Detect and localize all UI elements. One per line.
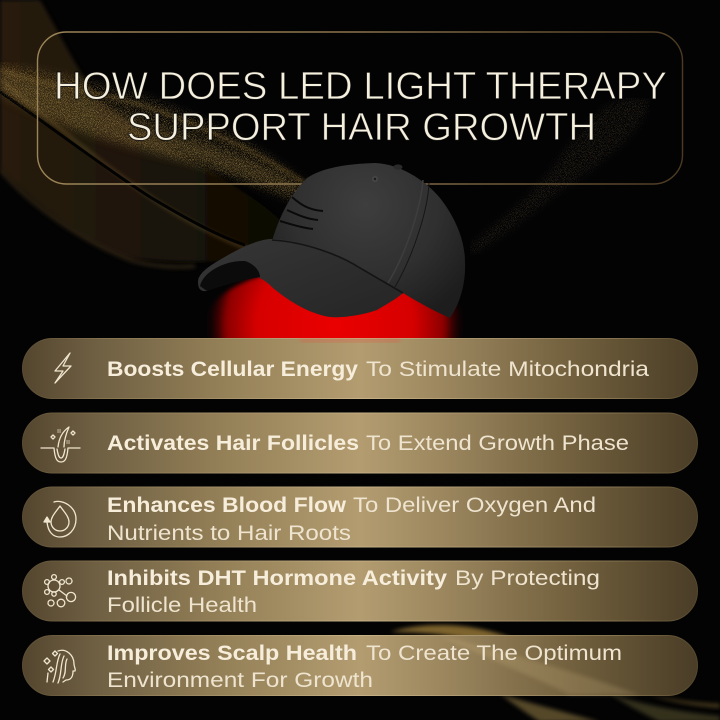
text: inhibits DHT hormone activity (107, 567, 600, 617)
gold light streak crossing panel (440, 636, 640, 695)
title panel (38, 32, 682, 184)
icon: lightning bolt (55, 353, 71, 383)
title heading: SUPPORT HAIR GROWTH (127, 106, 596, 149)
text: enhances blood flow: To Deliver Oxygen And (353, 494, 596, 517)
red LED glow under cap (209, 277, 461, 338)
text: improves scalp health: Improves Scalp Health (107, 642, 357, 665)
text: enhances blood flow: Enhances Blood Flow (107, 494, 347, 517)
cap illustration (198, 163, 465, 318)
panel: enhances blood flow (22, 487, 698, 547)
text: boosts cellular energy: Boosts Cellular Energy (107, 358, 358, 381)
text: improves scalp health: Environment For Growth (107, 669, 373, 692)
text: boosts cellular energy (107, 358, 649, 381)
text: enhances blood flow: Nutrients to Hair Roots (107, 522, 351, 545)
panel: activates hair follicles (22, 413, 698, 473)
text: activates hair follicles (107, 432, 629, 455)
text: boosts cellular energy: To Stimulate Mitochondria (366, 358, 649, 381)
text: inhibits DHT hormone activity: Inhibits DHT Hormone Activity (107, 567, 447, 590)
text: activates hair follicles: To Extend Growth Phase (366, 432, 629, 455)
title heading: HOW DOES LED LIGHT THERAPY (54, 65, 667, 108)
panel: improves scalp health (22, 636, 698, 696)
text: inhibits DHT hormone activity: Follicle Health (107, 594, 257, 617)
icon: hair follicle (41, 427, 80, 462)
icon: molecules (45, 575, 76, 607)
icon: blood drop with circular arrow (44, 501, 76, 537)
icon: head with healthy hair (44, 650, 75, 683)
text: improves scalp health: To Create The Optimum (366, 642, 622, 665)
panel: boosts cellular energy (22, 338, 698, 398)
panel: inhibits DHT hormone activity (22, 561, 698, 621)
text: activates hair follicles: Activates Hair Follicles (107, 432, 359, 455)
text: improves scalp health (107, 642, 622, 692)
text: enhances blood flow (107, 494, 596, 545)
title heading (54, 65, 667, 149)
text: inhibits DHT hormone activity: By Protecting (455, 567, 600, 590)
